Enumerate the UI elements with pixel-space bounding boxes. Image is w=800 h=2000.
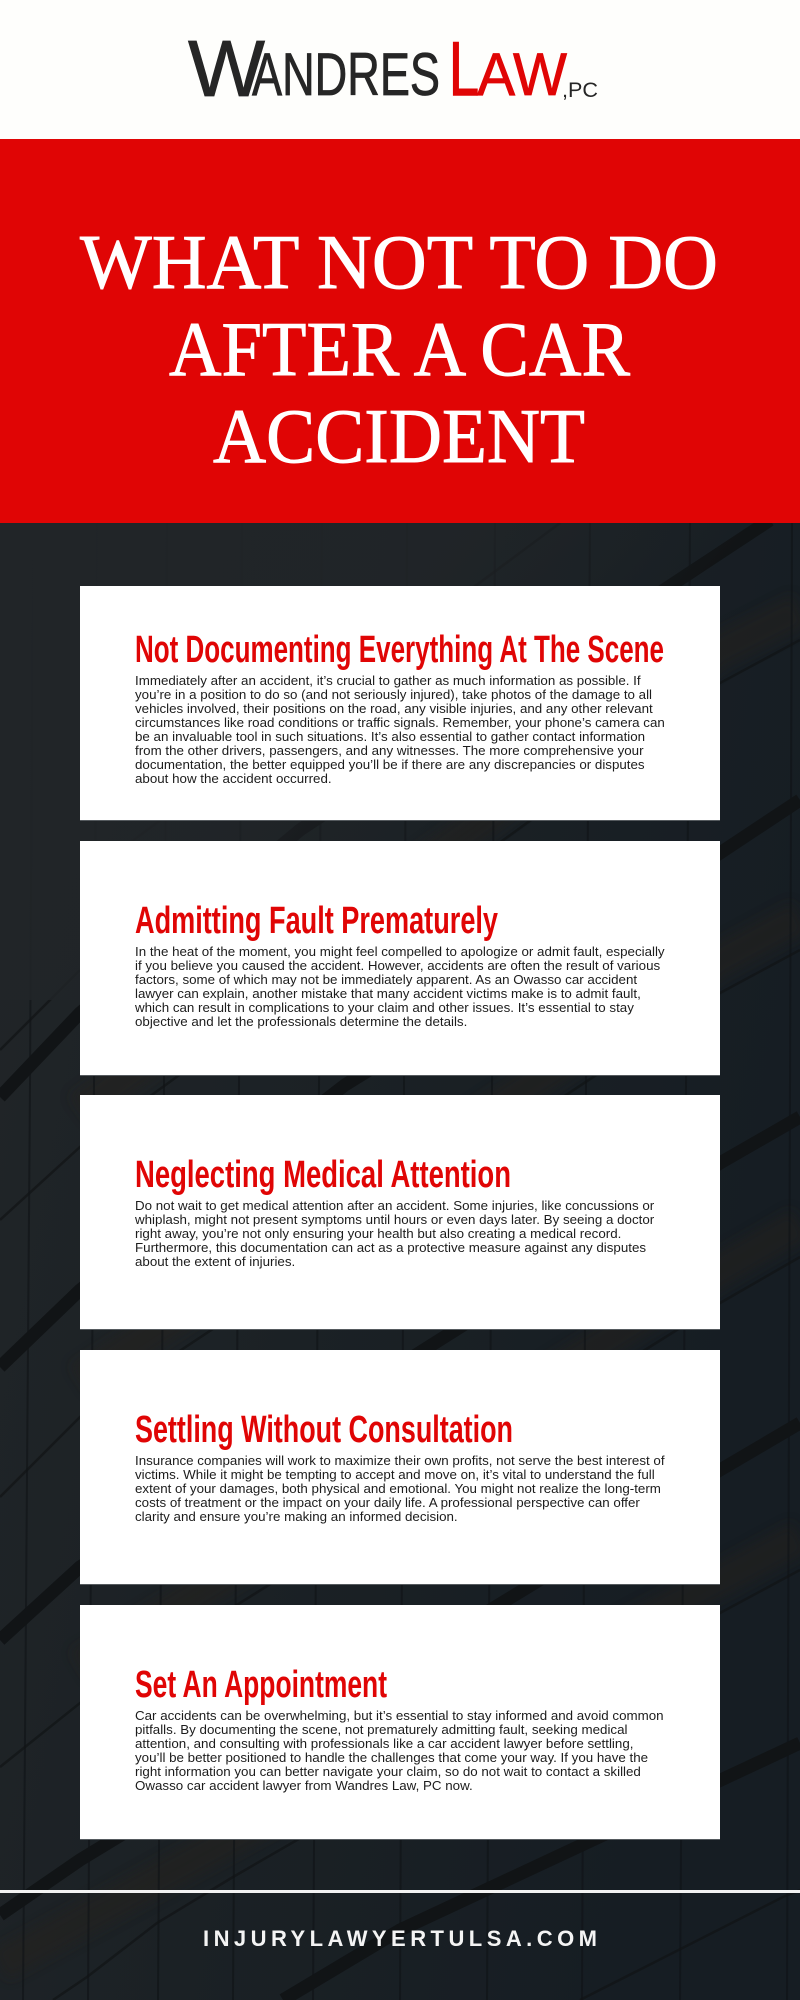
body text: victims. While it might be tempting to accept and move on, it’s vital to understand the full — [135, 1467, 655, 1482]
body text — [135, 944, 665, 1029]
body text: In the heat of the moment, you might feel compelled to apologize or admit fault, especially — [135, 944, 665, 959]
panel: neglecting medical attention — [80, 1095, 720, 1329]
body text — [135, 1708, 664, 1793]
body text — [135, 673, 665, 786]
body text: Immediately after an accident, it’s crucial to gather as much information as possible. If — [135, 673, 641, 688]
body text: attention, and consulting with professionals like a car accident lawyer before settling, — [135, 1736, 633, 1751]
body text: extent of your damages, both physical and emotional. You might not realize the long-term — [135, 1481, 661, 1496]
body text: from the other drivers, passengers, and any witnesses. The more comprehensive your — [135, 743, 644, 758]
panel: admitting fault — [80, 841, 720, 1075]
footer website url: INJURYLAWYERTULSA.COM — [203, 1926, 597, 1951]
logo: Wandres Law, PC: ANDRES — [252, 41, 440, 108]
body text: factors, some of which may not be immediately apparent. As an Owasso car accident — [135, 972, 637, 987]
body text: costs of treatment or the impact on your daily life. A professional perspective can offer — [135, 1495, 640, 1510]
body text: Do not wait to get medical attention after an accident. Some injuries, like concussions or — [135, 1198, 654, 1213]
body text: you’ll be better positioned to handle the challenges that come your way. If you have the — [135, 1750, 648, 1765]
body text: about the extent of injuries. — [135, 1254, 295, 1269]
logo: Wandres Law, PC: AW — [477, 41, 567, 108]
heading: Settling Without Consultation — [135, 1409, 513, 1451]
body text: Owasso car accident lawyer from Wandres Law, PC now. — [135, 1778, 473, 1793]
body text: whiplash, might not present symptoms until hours or even days later. By seeing a doctor — [135, 1212, 654, 1227]
title: WHAT NOT TO DO — [80, 219, 718, 305]
heading: Neglecting Medical Attention — [135, 1154, 511, 1196]
body text: pitfalls. By documenting the scene, not prematurely admitting fault, seeking medical — [135, 1722, 628, 1737]
title: ACCIDENT — [213, 393, 585, 479]
body text: which can result in complications to your claim and other issues. It’s essential to stay — [135, 1000, 634, 1015]
body text: Car accidents can be overwhelming, but it’s essential to stay informed and avoid common — [135, 1708, 664, 1723]
heading: Set An Appointment — [135, 1664, 387, 1706]
body text: lawyer can explain, another mistake that many accident victims make is to admit fault, — [135, 986, 641, 1001]
logo: Wandres Law, PC: ,PC — [562, 79, 598, 102]
body text: objective and let the professionals determine the details. — [135, 1014, 467, 1029]
logo: Wandres Law, PC — [188, 30, 598, 110]
background: dark building facade — [0, 523, 800, 2000]
panel: settling without consultation — [80, 1350, 720, 1584]
body text — [135, 1198, 654, 1269]
body text: right away, you’re not only ensuring your health but also creating a medical record. — [135, 1226, 621, 1241]
body text: Insurance companies will work to maximize their own profits, not serve the best interest of — [135, 1453, 665, 1468]
body text: clarity and ensure you’re making an informed decision. — [135, 1509, 458, 1524]
title banner — [0, 139, 800, 523]
body text: right information you can better navigate your claim, so do not wait to contact a skilled — [135, 1764, 641, 1779]
body text: circumstances like road conditions or traffic signals. Remember, your phone’s camera can — [135, 715, 665, 730]
body text: documentation, the better equipped you’ll be if there are any discrepancies or disputes — [135, 757, 645, 772]
title: AFTER A CAR — [169, 306, 631, 392]
body text: be an invaluable tool in such situations. It’s also essential to gather contact information — [135, 729, 645, 744]
body text: about how the accident occurred. — [135, 771, 332, 786]
logo header band — [0, 0, 800, 139]
body text: you’re in a position to do so (and not seriously injured), take photos of the damage to all — [135, 687, 652, 702]
body text — [135, 1453, 665, 1524]
body text: vehicles involved, their positions on the road, any visible injuries, and any other relevant — [135, 701, 653, 716]
title — [80, 219, 718, 479]
heading: Admitting Fault Prematurely — [135, 900, 498, 942]
body text: if you believe you caused the accident. However, accidents are often the result of various — [135, 958, 660, 973]
panel: not documenting — [80, 586, 720, 820]
panel: set an appointment — [80, 1605, 720, 1839]
body text: Furthermore, this documentation can act as a protective measure against any disputes — [135, 1240, 646, 1255]
